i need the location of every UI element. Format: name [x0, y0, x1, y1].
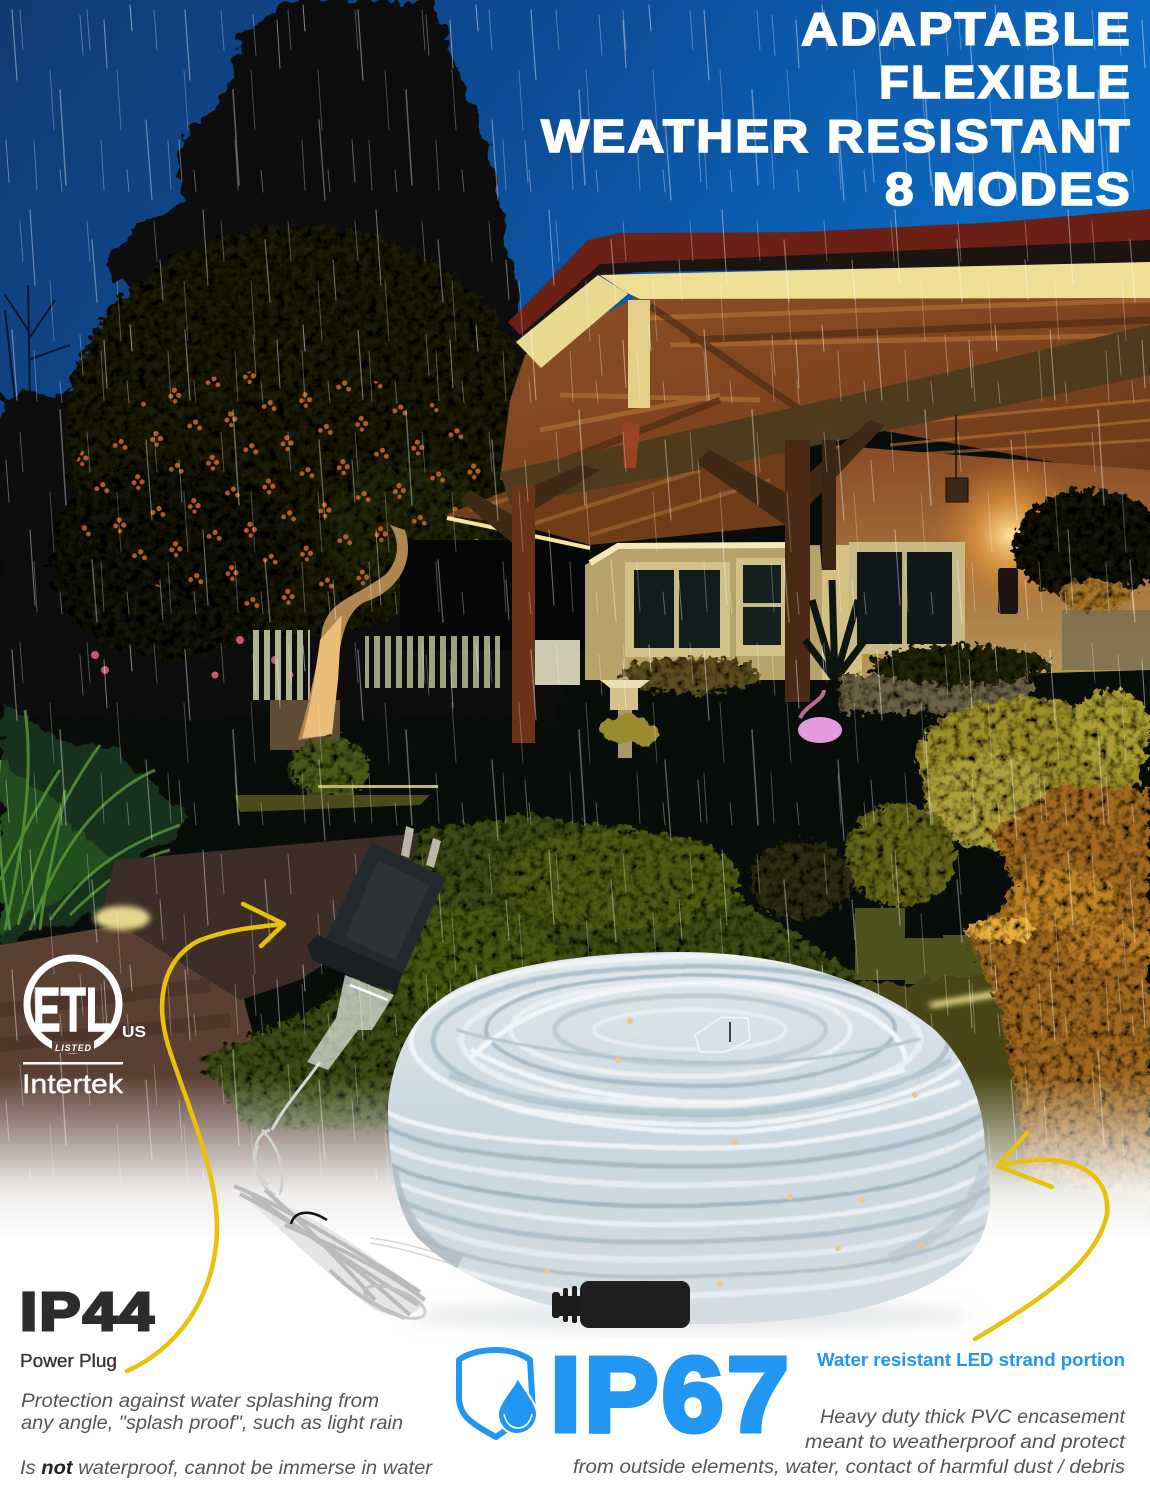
lit shrubs right: [750, 690, 1150, 920]
coil top surface: [410, 956, 970, 1124]
garden base darkness: [0, 420, 1150, 1240]
spot on ground: [94, 906, 150, 930]
fruit tree canopy: [50, 225, 535, 660]
post braces: [460, 420, 885, 545]
patio ceiling: [500, 295, 1150, 480]
pink flamingo: [798, 690, 842, 743]
coil side wraps: [385, 1095, 985, 1148]
sconce lantern: [998, 568, 1018, 614]
clear neck: [307, 975, 394, 1070]
lawn lower right: [860, 960, 1150, 1240]
lit tree trunk: [298, 525, 408, 740]
roof tiles: [508, 209, 1150, 335]
black inline connector: [552, 1281, 690, 1328]
headline: WEATHER RESISTANT: [541, 110, 1132, 162]
house lower section: [585, 545, 830, 680]
ip44 plug adapter: [307, 826, 446, 1070]
headline: [541, 3, 1132, 215]
etl listed certification badge: LISTED: [55, 1043, 92, 1053]
ip44 description: Is not waterproof, cannot be immerse in water: [20, 1458, 433, 1479]
arrow to coil: [975, 1133, 1107, 1339]
orange croton plant: [965, 785, 1150, 1200]
patio back darkness and fence: [250, 540, 590, 750]
palm near post: [805, 580, 865, 680]
lattice: [1062, 610, 1150, 670]
ip67 description: meant to weatherproof and protect: [805, 1432, 1126, 1453]
ceiling post: [628, 300, 650, 408]
etl listed certification badge: [22, 958, 146, 1099]
front fascia beam: [600, 262, 1150, 299]
etl listed certification badge: ETL: [33, 976, 111, 1045]
ip67 description: Heavy duty thick PVC encasement: [820, 1407, 1126, 1428]
ground light: [928, 990, 1002, 1008]
fruit clusters: [70, 370, 500, 610]
lit bush near trunk: [290, 738, 370, 798]
lantern statue: [600, 680, 660, 758]
headline: 8 MODES: [885, 163, 1132, 215]
ip44 heading: IP44: [20, 1282, 156, 1342]
plug flange: [307, 935, 402, 992]
etl listed certification badge: US: [122, 1024, 146, 1041]
led rope coil: [385, 952, 990, 1330]
house windows: [625, 542, 965, 657]
headline: FLEXIBLE: [879, 56, 1132, 108]
ip44 description: any angle, "splash proof", such as light rain: [21, 1413, 403, 1434]
ip44 description: Protection against water splashing from: [21, 1391, 379, 1412]
prongs: [401, 826, 441, 868]
patio furniture and bonsai: [620, 645, 1050, 713]
ip67 description: from outside elements, water, contact of harmful dust / debris: [573, 1457, 1126, 1478]
white fade to bottom: [0, 1075, 1150, 1240]
sky: [0, 0, 1150, 420]
dark tree silhouette: [0, 0, 560, 640]
left ornamental grass: [0, 700, 190, 945]
ip67 subheading: Water resistant LED strand portion: [817, 1350, 1125, 1370]
wall sconce glow: [930, 455, 1090, 615]
right dark tree: [1012, 490, 1150, 611]
water shield icon: [459, 1350, 537, 1437]
power cord bundle: [234, 1062, 556, 1325]
ip67 description: [573, 1407, 1126, 1478]
central green shrub: [200, 815, 900, 1130]
headline: ADAPTABLE: [801, 3, 1132, 55]
plug body: [320, 842, 446, 985]
pink flowers: [91, 636, 294, 678]
wall behind patio: [820, 445, 1150, 680]
path lights strip: [235, 795, 430, 812]
arrow to plug: [127, 904, 284, 1371]
lower ring shadow: [392, 1165, 460, 1262]
left soffit: [516, 275, 628, 368]
led beads: [544, 1018, 925, 1287]
lower ground: [0, 925, 420, 1240]
ip44 description: [20, 1391, 433, 1479]
etl listed certification badge: Intertek: [22, 1069, 124, 1099]
main support beam: [500, 325, 1150, 505]
hanging lantern: [946, 415, 968, 502]
path: [100, 830, 440, 1000]
power plug label: Power Plug: [20, 1351, 117, 1371]
lower ceiling under beam: [445, 425, 785, 545]
stump planters: [855, 908, 1012, 984]
coil end cap: [695, 1017, 750, 1052]
rain: [0, 0, 1150, 1180]
bare tree at far left: [5, 285, 70, 400]
hanging deer ornament: [622, 420, 640, 468]
posts: [512, 485, 535, 743]
ip67 heading: IP67: [550, 1336, 792, 1454]
